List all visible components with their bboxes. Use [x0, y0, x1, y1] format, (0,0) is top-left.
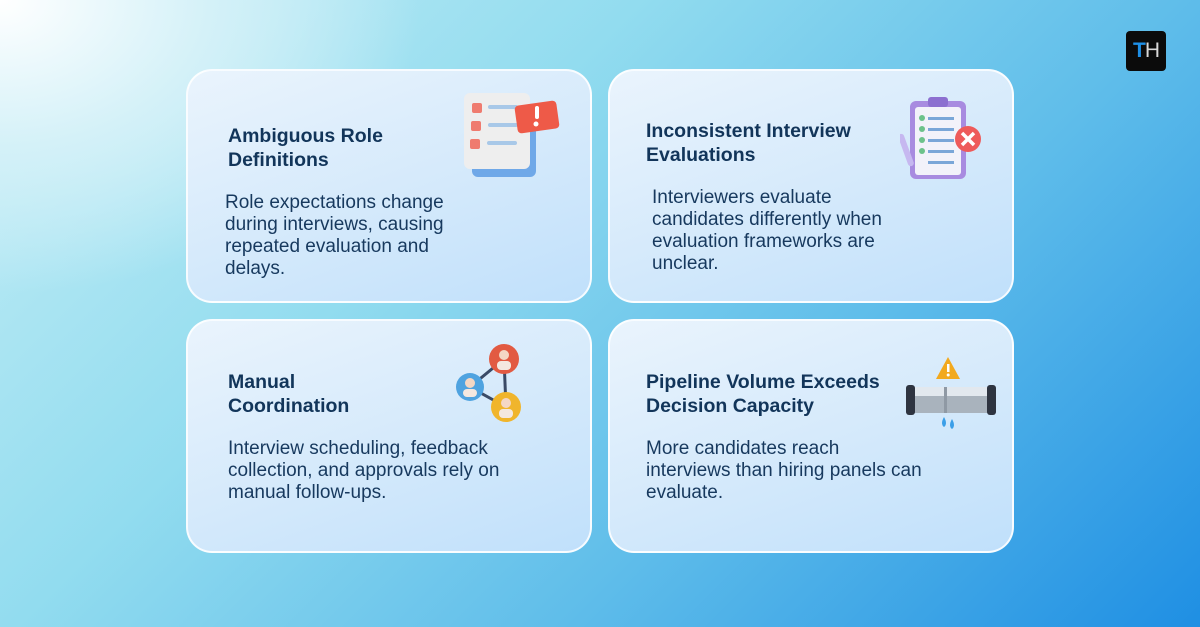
text block: manual follow-ups.	[228, 482, 386, 503]
text block	[652, 187, 882, 274]
text block: Interview scheduling, feedback	[228, 438, 488, 459]
text block: evaluation frameworks are	[652, 231, 875, 252]
text block: repeated evaluation and	[225, 236, 429, 257]
heading: Decision Capacity	[646, 395, 814, 417]
text block: during interviews, causing	[225, 214, 444, 235]
heading	[228, 125, 383, 171]
heading: Definitions	[228, 149, 329, 171]
heading	[228, 371, 349, 417]
icon: leaking pipe with warning	[906, 357, 996, 429]
panel: ambiguous role definitions	[186, 69, 592, 303]
text block: collection, and approvals rely on	[228, 460, 499, 481]
text block: Interviewers evaluate	[652, 187, 832, 208]
text block: delays.	[225, 258, 285, 279]
text block: candidates differently when	[652, 209, 882, 230]
heading: Ambiguous Role	[228, 125, 383, 147]
icon: network of people	[456, 344, 521, 422]
heading: Coordination	[228, 395, 349, 417]
heading: Inconsistent Interview	[646, 120, 851, 142]
text block	[228, 438, 499, 503]
panel: pipeline volume	[608, 319, 1014, 553]
logo	[1126, 31, 1166, 71]
panel: manual coordination	[186, 319, 592, 553]
text block: evaluate.	[646, 482, 723, 503]
panel: inconsistent interview evaluations	[608, 69, 1014, 303]
heading: Manual	[228, 371, 295, 393]
text block: interviews than hiring panels can	[646, 460, 922, 481]
text block: unclear.	[652, 253, 719, 274]
heading	[646, 120, 851, 166]
text block: More candidates reach	[646, 438, 839, 459]
text block	[646, 438, 922, 503]
heading: Evaluations	[646, 144, 755, 166]
heading	[646, 371, 880, 417]
icon: checklist with alert	[464, 93, 560, 177]
text block	[225, 192, 444, 279]
icon: clipboard with x	[900, 97, 981, 179]
logo: TH	[1133, 39, 1159, 62]
heading: Pipeline Volume Exceeds	[646, 371, 880, 393]
text block: Role expectations change	[225, 192, 444, 213]
